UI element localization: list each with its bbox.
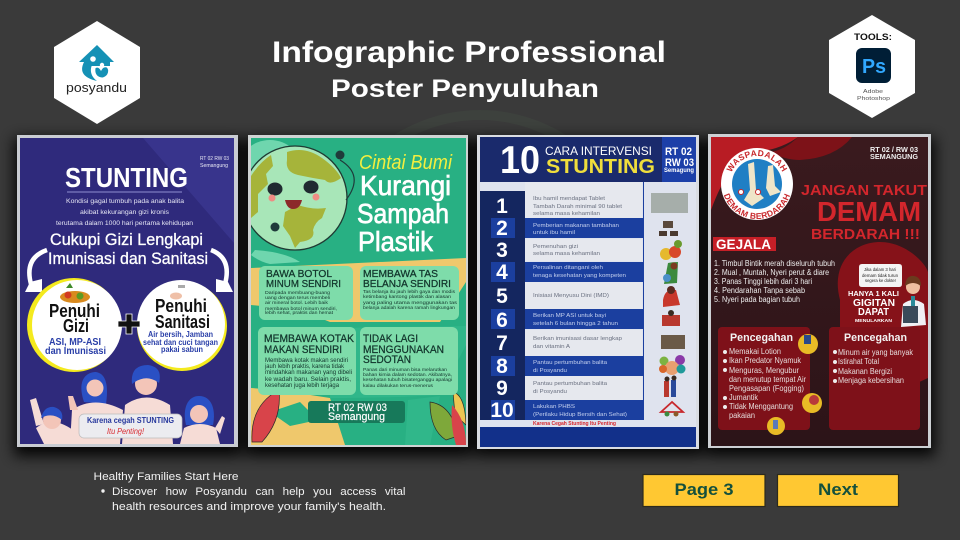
symptoms list: 2. Mual , Muntah, Nyeri perut & diare xyxy=(714,268,829,277)
steps list: untuk ibu hamil xyxy=(533,230,575,236)
caption text block xyxy=(94,471,406,513)
button: page 3 xyxy=(643,474,765,506)
circle: penuhi gizi: Penuhi xyxy=(49,301,100,321)
header: Semagung xyxy=(664,168,694,174)
arrow right xyxy=(211,250,233,292)
icon: hand washing xyxy=(170,285,185,300)
badge: waspadalah demam berdarah xyxy=(721,148,793,220)
number column: 1 xyxy=(496,195,508,218)
card: tidak lagi sedotan: Panas dari minuman bisa melarutkan xyxy=(363,367,447,373)
steps list: Pantau pertumbuhan balita xyxy=(533,381,607,387)
symptoms list: 1. Timbul Bintik merah diseluruh tubuh xyxy=(714,259,835,268)
heading line 2: Poster Penyuluhan xyxy=(331,75,599,103)
card: membawa kotak makan: mindahkan makanan yang dibeli xyxy=(265,370,352,376)
warning text xyxy=(848,291,899,323)
number column: 5 xyxy=(496,285,508,308)
poster heading xyxy=(357,152,452,257)
red footnote: Karena Cegah Stunting Itu Penting xyxy=(533,421,616,427)
card: bawa botol: Daripada membuang-buang xyxy=(265,290,330,296)
card: bawa botol: membawa botol minum sendiri, xyxy=(265,306,337,312)
label: RT 02 RW 03 xyxy=(200,156,229,162)
header: STUNTING xyxy=(546,156,655,178)
card: membawa kotak makan: MAKAN SENDIRI xyxy=(264,344,342,356)
number column: 10 xyxy=(490,399,514,422)
gejala label: GEJALA xyxy=(716,236,771,252)
poster heading: JANGAN TAKUT xyxy=(801,183,927,199)
number column: 7 xyxy=(496,332,508,355)
panel: pencegahan right: Menjaga kebersihan xyxy=(838,376,904,385)
poster 1: stunting: Semangung xyxy=(200,163,228,169)
poster 2: kurangi sampah plastik xyxy=(238,135,468,447)
card: bawa botol: uang dengan terus membeli xyxy=(265,295,330,301)
heading line 1: Infographic Professional xyxy=(272,36,666,69)
panel: pencegahan left: dan menutup tempat Air xyxy=(729,375,806,384)
symptoms list: 3. Panas Tinggi lebih dari 3 hari xyxy=(714,277,812,286)
speech bubble: Jika dalam 3 hari xyxy=(864,267,896,272)
location banner xyxy=(308,401,405,423)
caption body: health resources and improve your family's health. xyxy=(112,501,386,513)
slogan: Imunisasi dan Sanitasi xyxy=(48,249,208,268)
steps list: dan vitamin A xyxy=(533,344,571,350)
warning text: DAPAT xyxy=(858,307,889,318)
circle: penuhi sanitasi: Penuhi xyxy=(155,296,207,316)
icon: smiling globe xyxy=(243,146,354,250)
card: tidak lagi sedotan: kesehatan tubuh bisaterganggu apalagi xyxy=(363,377,452,383)
card: membawa tas: yang paling utama menggunakan tas xyxy=(363,300,458,305)
header xyxy=(480,137,696,182)
callout xyxy=(79,414,182,438)
circle: penuhi gizi: Gizi xyxy=(63,316,89,336)
callout: Itu Penting! xyxy=(107,427,145,436)
location banner: Semangung xyxy=(328,411,385,423)
header: RW 03 xyxy=(665,157,694,169)
card: bawa botol: BAWA BOTOL xyxy=(266,269,332,280)
plus sign xyxy=(118,314,140,334)
location xyxy=(870,147,919,161)
slogan: Cukupi Gizi Lengkapi xyxy=(50,230,203,249)
logo wordmark: posyandu xyxy=(66,80,127,95)
button: next xyxy=(778,474,898,506)
callout: Karena cegah STUNTING xyxy=(87,416,174,425)
tools badge: Adobe xyxy=(863,89,883,95)
steps list: setelah 6 bulan hingga 2 tahun xyxy=(533,321,618,327)
panel: pencegahan left: Tidak Menggantung xyxy=(729,402,793,411)
panel: pencegahan left: Pengasapan (Fogging) xyxy=(729,384,804,393)
steps list: tenaga kesehatan yang kompeten xyxy=(533,273,626,279)
panel: pencegahan right: Makanan Bergizi xyxy=(838,367,892,376)
step icons xyxy=(651,193,688,416)
panel: pencegahan left: Jumantik xyxy=(729,393,759,402)
caption body xyxy=(112,486,406,513)
circle: penuhi sanitasi: Air bersih, Jamban xyxy=(148,330,213,339)
number column: 3 xyxy=(496,239,508,262)
steps list: selama masa kehamilan xyxy=(533,251,600,257)
tools badge: TOOLS: xyxy=(854,32,892,42)
circle: penuhi sanitasi: sehat dan cuci tangan xyxy=(143,338,218,347)
steps list: Tambah Darah minimal 90 tablet xyxy=(533,204,623,210)
card: bawa botol xyxy=(259,266,353,320)
poster heading xyxy=(801,183,927,243)
arrow left xyxy=(25,250,47,292)
panel: pencegahan right: Istirahat Total xyxy=(838,357,879,366)
steps list: (Perilaku Hidup Bersih dan Sehat) xyxy=(533,412,627,418)
number column: 4 xyxy=(496,261,508,284)
circle: penuhi sanitasi: Sanitasi xyxy=(155,312,210,332)
card: membawa kotak makan xyxy=(258,327,356,395)
steps list: Berikan MP ASI untuk bayi xyxy=(533,313,606,319)
symptoms list: 5. Nyeri pada bagian tubuh xyxy=(714,295,800,304)
icon: Photoshop: Ps xyxy=(862,56,886,78)
tools badge: Photoshop xyxy=(857,96,890,102)
card: tidak lagi sedotan: kalau dilakukan terus-menerus xyxy=(363,383,434,389)
badge: waspadalah demam berdarah: WASPADALAH xyxy=(726,150,788,172)
definition text: Kondisi gagal tumbuh pada anak balita xyxy=(66,198,184,205)
family illustration xyxy=(30,365,225,444)
location: SEMANGUNG xyxy=(870,154,919,161)
panel: pencegahan left: Memakai Lotion xyxy=(729,347,781,356)
number column xyxy=(480,191,525,422)
card: membawa kotak makan: jauh lebih praktis, karena tidak xyxy=(264,364,345,370)
steps list: selama masa kehamilan xyxy=(533,211,600,217)
panel: pencegahan left: Ikan Predator Nyamuk xyxy=(729,356,802,365)
circle: penuhi gizi: ASI, MP-ASI xyxy=(49,337,101,348)
bullet xyxy=(101,489,105,493)
card: membawa tas: BELANJA SENDIRI xyxy=(363,279,451,290)
poster heading: Cintai Bumi xyxy=(359,152,452,174)
slogan xyxy=(48,230,208,268)
steps list: Lakukan PHBS xyxy=(533,404,576,410)
card: membawa kotak makan: MEMBAWA KOTAK xyxy=(264,333,355,345)
card: membawa tas: belanja adalah karena ramah lingkungan xyxy=(363,305,455,310)
steps list: Pemberian makanan tambahan xyxy=(533,223,619,229)
panel: pencegahan left: Menguras, Mengubur xyxy=(729,366,799,375)
steps list: Persalinan ditangani oleh xyxy=(533,265,603,271)
card: tidak lagi sedotan: MENGGUNAKAN xyxy=(363,344,444,356)
poster heading: STUNTING xyxy=(65,162,188,193)
warning text: MENULARKAN xyxy=(855,318,892,323)
card: membawa tas xyxy=(360,266,459,320)
symptoms list xyxy=(714,259,835,304)
card: membawa kotak makan: kesehatan juga lebih terjaga xyxy=(265,383,340,389)
panel: pencegahan left xyxy=(718,327,822,435)
button: page 3: Page 3 xyxy=(674,480,734,499)
card: membawa tas: Tas belanja itu jauh lebih gaya dan modis xyxy=(363,289,456,294)
card: tidak lagi sedotan: SEDOTAN xyxy=(363,354,411,366)
badge: waspadalah demam berdarah: DEMAM BERDARAH xyxy=(724,193,790,220)
card: membawa tas: ketimbang kantong plastik dan alasan xyxy=(363,294,452,299)
card: membawa tas: MEMBAWA TAS xyxy=(363,269,438,280)
panel: pencegahan left: Pencegahan xyxy=(730,332,793,344)
poster 3: 10 cara intervensi stunting xyxy=(477,135,699,449)
leaves xyxy=(252,390,466,445)
poster heading: Sampah xyxy=(357,198,449,229)
caption heading: Healthy Families Start Here xyxy=(94,471,238,483)
circle: penuhi gizi: dan Imunisasi xyxy=(45,346,106,357)
icon: doctor xyxy=(901,276,926,327)
definition text: terutama dalam 1000 hari pertama kehidupan xyxy=(56,220,193,227)
warning text: HANYA 1 KALI xyxy=(848,291,899,298)
header: CARA INTERVENSI xyxy=(545,146,652,158)
watermark ring xyxy=(325,115,635,425)
panel: pencegahan right: Pencegahan xyxy=(844,332,907,344)
steps list xyxy=(525,182,644,420)
card: membawa kotak makan: ke wadah baru. Selain praktis, xyxy=(265,377,351,383)
button: next: Next xyxy=(818,480,858,499)
card: tidak lagi sedotan: TIDAK LAGI xyxy=(363,333,418,345)
card: bawa botol: lebih sehat, praktis dan hemat xyxy=(265,310,334,316)
steps list: Ibu hamil mendapat Tablet xyxy=(533,196,606,202)
card: tidak lagi sedotan xyxy=(360,327,458,395)
steps list: Inisiasi Menyusu Dini (IMD) xyxy=(533,293,609,299)
speech bubble: segera ke dokter xyxy=(865,278,897,283)
speech bubble: demam tidak turun xyxy=(862,273,899,278)
logo badge: posyandu xyxy=(54,21,140,124)
panel: pencegahan right: Minum air yang banyak xyxy=(838,348,914,357)
speech bubble xyxy=(859,264,902,287)
location banner: RT 02 RW 03 xyxy=(328,402,387,414)
location: RT 02 / RW 03 xyxy=(870,147,918,154)
poster shadows xyxy=(14,138,935,456)
card: bawa botol: MINUM SENDIRI xyxy=(266,279,341,290)
panel: pencegahan left: pakaian xyxy=(729,411,755,420)
steps list: Berikan imunisasi dasar lengkap xyxy=(533,336,622,342)
card: membawa kotak makan: Membawa kotak makan sendiri xyxy=(265,358,348,364)
poster heading: Kurangi xyxy=(360,170,451,201)
definition text xyxy=(56,198,193,227)
warning text: GIGITAN xyxy=(853,298,895,309)
circle: penuhi sanitasi xyxy=(137,280,227,371)
steps list: Pantau pertumbuhan balita xyxy=(533,360,607,366)
poster 4: demam berdarah xyxy=(708,134,931,448)
footer bar xyxy=(480,427,696,447)
number column: 6 xyxy=(496,309,508,332)
symptoms list: 4. Pendarahan Tanpa sebab xyxy=(714,286,805,295)
circle: penuhi sanitasi: pakai sabun xyxy=(161,345,203,354)
poster heading: BERDARAH !!! xyxy=(811,227,920,243)
icons: prevention badges xyxy=(767,334,822,435)
icon: fruits xyxy=(60,283,90,303)
steps list: di Posyandu xyxy=(533,368,567,374)
number column: 9 xyxy=(496,377,508,400)
card: bawa botol: air mineral botol. Lebih baik xyxy=(265,300,329,306)
title xyxy=(272,36,666,103)
steps list: di Posyandu xyxy=(533,389,567,395)
poster heading: DEMAM xyxy=(817,196,921,227)
poster heading: Plastik xyxy=(358,226,434,257)
poster 1: stunting xyxy=(17,135,238,447)
header: 10 xyxy=(500,139,540,182)
caption body: Discover how Posyandu can help you access vital xyxy=(112,486,406,498)
icon: posyandu house and family xyxy=(79,45,114,81)
definition text: akibat kekurangan gizi kronis xyxy=(80,209,170,216)
header: RT 02 xyxy=(665,146,692,158)
number column: 8 xyxy=(496,355,508,378)
number column: 2 xyxy=(496,217,508,240)
panel: pencegahan right xyxy=(829,327,920,430)
tools badge xyxy=(829,15,915,118)
card: tidak lagi sedotan: bahan kimia dalam sedotan. Akibatnya, xyxy=(363,372,452,378)
circle: penuhi gizi xyxy=(27,278,122,372)
steps list: Pemenuhan gizi xyxy=(533,244,578,250)
